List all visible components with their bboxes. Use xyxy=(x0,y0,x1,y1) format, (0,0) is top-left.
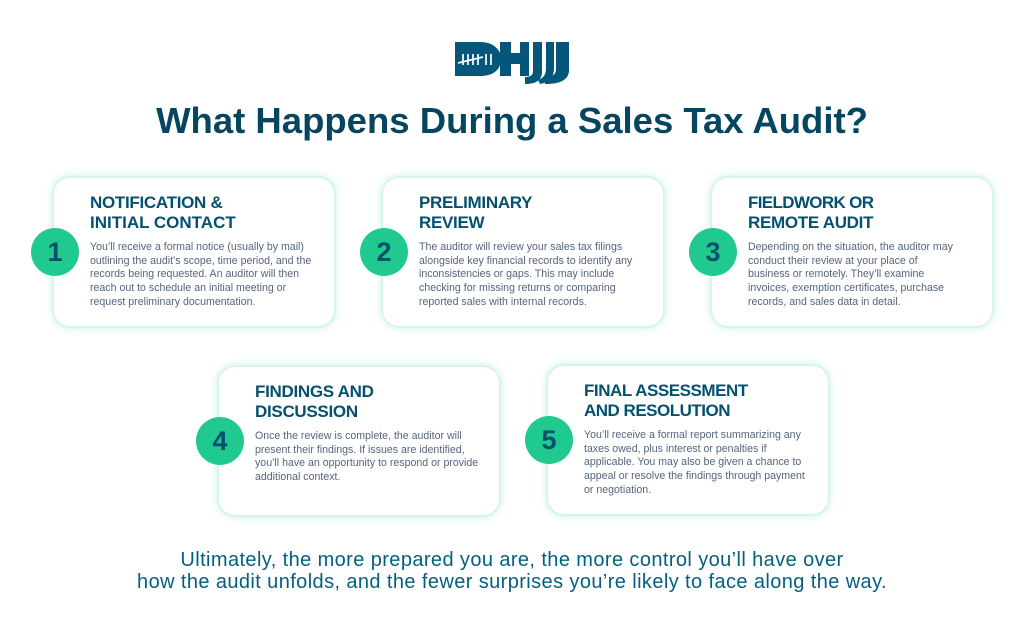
number badge 2 xyxy=(360,228,408,276)
text: step 2: checking for missing returns or comparing xyxy=(419,282,616,294)
number badge 1: 1 xyxy=(47,237,63,267)
number badge 5 xyxy=(525,416,573,464)
heading: step 3: REMOTE AUDIT xyxy=(748,213,873,232)
closing statement: Ultimately, the more prepared you are, the more control you’ll have over xyxy=(180,549,844,571)
heading: step 1: NOTIFICATION & xyxy=(90,193,222,212)
text: step 1: outlining the audit’s scope, time period, and the xyxy=(90,255,311,267)
text: step 2: alongside key financial records to identify any xyxy=(419,255,632,267)
text: step 3 xyxy=(748,241,953,308)
text: step 2: inconsistencies or gaps. This may include xyxy=(419,268,614,280)
text: step 1: You’ll receive a formal notice (usually by mail) xyxy=(90,241,304,253)
panel: step 5 xyxy=(548,366,828,514)
heading: step 2: PRELIMINARY xyxy=(419,193,532,212)
text: step 5: taxes owed, plus interest or penalties if xyxy=(584,443,767,455)
text: step 1 xyxy=(90,241,311,308)
number badge 3: 3 xyxy=(705,237,721,267)
text: step 5: You’ll receive a formal report summarizing any xyxy=(584,429,801,441)
text: step 2: reported sales with internal records. xyxy=(419,296,587,308)
heading: step 3: FIELDWORK OR xyxy=(748,193,873,212)
text: step 4: additional context. xyxy=(255,471,340,483)
closing statement xyxy=(137,549,887,593)
heading: step 1 xyxy=(90,193,236,232)
heading: step 2 xyxy=(419,193,532,232)
text: step 1: request preliminary documentation. xyxy=(90,296,255,308)
number badge 1 xyxy=(31,228,79,276)
text: step 4: you’ll have an opportunity to respond or provide xyxy=(255,457,478,469)
heading: step 4: DISCUSSION xyxy=(255,402,358,421)
text: step 5: applicable. You may also be given a chance to xyxy=(584,456,801,468)
heading: step 5: AND RESOLUTION xyxy=(584,401,730,420)
panel: step 1 xyxy=(54,178,334,326)
number badge 5: 5 xyxy=(541,425,557,455)
text: step 3: invoices, exemption certificates, purchase xyxy=(748,282,944,294)
number badge 4: 4 xyxy=(212,426,228,456)
title: What Happens During a Sales Tax Audit? xyxy=(156,100,868,141)
heading: step 4 xyxy=(255,382,374,421)
text: step 5 xyxy=(584,429,805,496)
panel: step 2 xyxy=(383,178,663,326)
text: step 3: conduct their review at your place of xyxy=(748,255,918,267)
heading: step 5: FINAL ASSESSMENT xyxy=(584,381,748,400)
heading: step 4: FINDINGS AND xyxy=(255,382,374,401)
panel: step 4 xyxy=(219,367,499,515)
text: step 1: reach out to schedule an initial meeting or xyxy=(90,282,286,294)
text: step 2: The auditor will review your sales tax filings xyxy=(419,241,622,253)
text: step 4: Once the review is complete, the auditor will xyxy=(255,430,462,442)
text: step 3: records, and sales data in detail. xyxy=(748,296,901,308)
text: step 5: or negotiation. xyxy=(584,484,651,496)
heading: step 5 xyxy=(584,381,748,420)
number badge 4 xyxy=(196,417,244,465)
number badge 3 xyxy=(689,228,737,276)
heading: step 1: INITIAL CONTACT xyxy=(90,213,236,232)
text: step 2 xyxy=(419,241,632,308)
text: step 4: present their findings. If issues are identified, xyxy=(255,444,465,456)
heading: step 2: REVIEW xyxy=(419,213,484,232)
number badge 2: 2 xyxy=(376,237,392,267)
logo: DHJJ xyxy=(455,42,569,84)
heading: step 3 xyxy=(748,193,874,232)
closing statement: how the audit unfolds, and the fewer surprises you’re likely to face along the way. xyxy=(137,571,887,593)
text: step 3: business or remotely. They’ll examine xyxy=(748,268,924,280)
text: step 5: appeal or resolve the findings through payment xyxy=(584,470,805,482)
text: step 4 xyxy=(255,430,478,483)
text: step 3: Depending on the situation, the auditor may xyxy=(748,241,953,253)
panel: step 3 xyxy=(712,178,992,326)
text: step 1: records being requested. An auditor will then xyxy=(90,268,299,280)
